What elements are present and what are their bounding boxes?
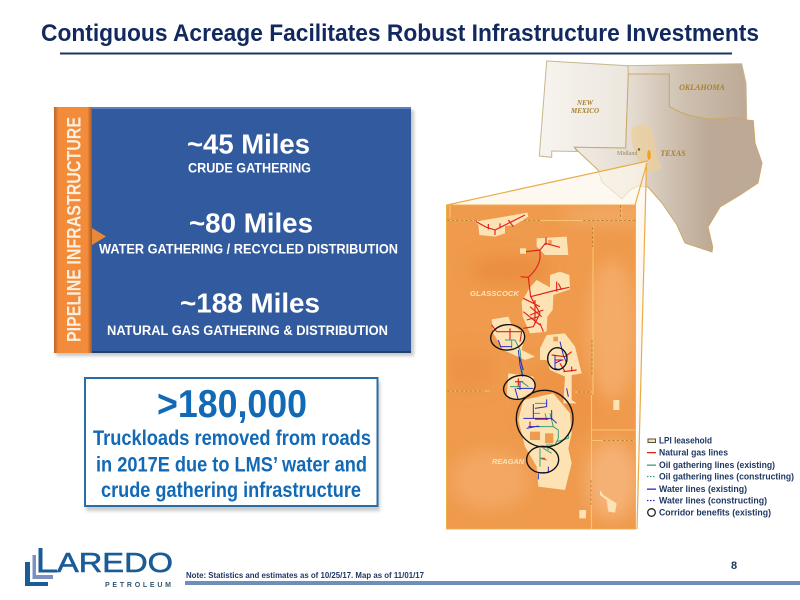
natural gas lines [476, 215, 577, 458]
legend: water lines constructing: Water lines (constructing) [659, 496, 767, 506]
callout: truckloads removed [85, 378, 380, 511]
water lines [498, 340, 568, 479]
callout: truckloads removed: Truckloads removed from roads [93, 427, 371, 450]
legend: corridor benefits: Corridor benefits (existing) [659, 508, 771, 518]
legend: water lines existing: Water lines (existing) [659, 484, 747, 494]
callout: truckloads removed: in 2017E due to LMS’ water and [96, 454, 367, 476]
legend: LPI leasehold: LPI leasehold [659, 436, 712, 446]
acreage location marker [647, 150, 651, 160]
county roads and boundaries [447, 205, 635, 529]
stat: crude gathering [187, 128, 311, 176]
callout: truckloads removed: crude gathering infrastructure [101, 479, 361, 502]
oil gathering lines [505, 340, 568, 467]
stat: crude gathering: ~45 Miles [187, 128, 310, 159]
pipeline networks [476, 215, 577, 479]
footnote: Note: Statistics and estimates as of 10/25/17. Map as of 11/01/17 [186, 570, 424, 580]
pointer arrow [92, 228, 106, 245]
stat: natural gas: ~188 Miles [180, 287, 320, 318]
legend: natural gas lines: Natural gas lines [659, 448, 728, 458]
legend [647, 436, 794, 518]
corridor benefit circles [490, 323, 573, 473]
side bar: orange label [54, 107, 92, 353]
callout: truckloads removed: >180,000 [157, 383, 307, 426]
stat: natural gas [107, 287, 388, 338]
panel: pipeline infrastructure [54, 107, 414, 356]
stat: water gathering: ~80 Miles [189, 208, 313, 239]
logo: Laredo Petroleum: AREDO [57, 547, 173, 578]
map: regional overview of Texas, New Mexico and Oklahoma [539, 61, 762, 252]
title: Contiguous Acreage Facilitates Robust Infrastructure Investments [41, 20, 759, 47]
legend: oil gathering existing: Oil gathering lines (existing) [659, 460, 775, 470]
stat: crude gathering: CRUDE GATHERING [188, 161, 311, 176]
logo: Laredo Petroleum: PETROLEUM [105, 582, 171, 589]
page number: 8 [731, 560, 737, 572]
label: Texas: TEXAS [660, 149, 686, 158]
label: Oklahoma: OKLAHOMA [679, 83, 726, 92]
label: Midland [617, 148, 640, 157]
label: Midland: Midland [617, 151, 637, 157]
leasehold tracts [475, 213, 619, 518]
stat: natural gas: NATURAL GAS GATHERING & DISTRIBUTION [107, 323, 388, 338]
terrain shading [448, 205, 635, 525]
footer bar [185, 581, 800, 585]
legend: oil gathering constructing: Oil gathering lines (constructing) [659, 472, 794, 482]
side bar: orange label: PIPELINE INFRASTRUCTURE [64, 117, 86, 342]
stat: water gathering [99, 208, 398, 256]
label: Reagan: REAGAN [492, 457, 525, 466]
label: Glasscock: GLASSCOCK [470, 289, 520, 298]
label: New Mexico: MEXICO [570, 107, 599, 115]
label: New Mexico: NEW [577, 99, 593, 107]
callout lines from marker to inset map [447, 161, 648, 529]
Permian basin highlight [632, 124, 662, 171]
inset map: Glasscock and Reagan counties [446, 204, 636, 530]
panel body: blue background [92, 107, 411, 353]
logo: Laredo Petroleum [25, 547, 173, 589]
stat: water gathering: WATER GATHERING / RECYCLED DISTRIBUTION [99, 241, 398, 256]
